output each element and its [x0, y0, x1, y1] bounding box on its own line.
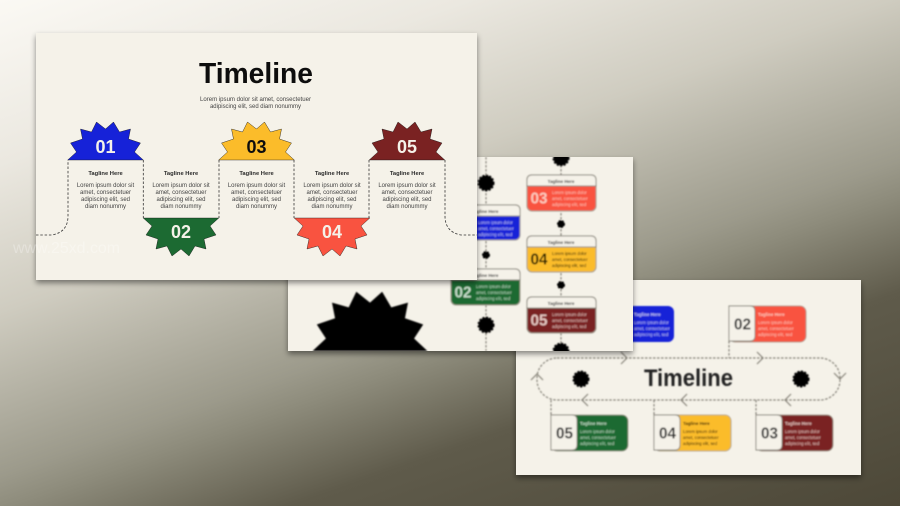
card 04 yellow: 04	[659, 426, 676, 442]
card 03 red: Tagline Here	[548, 179, 575, 184]
panel: front slide, starburst timeline	[36, 33, 477, 280]
card 05 green: Tagline Here	[580, 421, 607, 426]
card 03 maroon: adipiscing elit, sed	[785, 441, 820, 446]
text block 03: Lorem ipsum dolor sit	[228, 183, 286, 189]
text block 02: Tagline Here	[164, 171, 199, 177]
starburst 01 blue	[68, 122, 143, 160]
card 02 red: Tagline Here	[758, 312, 785, 317]
card 04 yellow: adipiscing elit, sed	[552, 263, 587, 268]
card 01 blue: amet, consectetuer	[478, 226, 514, 231]
connectors	[551, 341, 756, 415]
card 04 yellow: Tagline Here	[548, 240, 575, 245]
card 03 red: 03	[530, 190, 548, 208]
card 05 green	[551, 415, 628, 451]
text block 01: Lorem ipsum dolor sit	[77, 183, 135, 189]
black starburst	[313, 292, 427, 351]
card 02 red: Lorem ipsum dolor	[758, 320, 793, 325]
starburst 04 red: 04	[322, 222, 342, 242]
subtitle: Lorem ipsum dolor sit amet, consectetuer	[200, 97, 311, 103]
card 05 maroon: adipiscing elit, sed	[552, 324, 587, 329]
card 03 maroon	[756, 415, 833, 451]
text block 03: diam nonummy	[236, 204, 277, 210]
text block 03: Tagline Here	[239, 171, 274, 177]
card 03 red	[527, 175, 596, 211]
card 04 yellow: adipiscing elit, sed	[683, 441, 718, 446]
text block 04	[303, 171, 361, 210]
card 01 blue	[477, 204, 522, 242]
card 02 red: amet, consectetuer	[758, 326, 794, 331]
subtitle	[200, 97, 311, 110]
text block 02: diam nonummy	[160, 204, 202, 210]
title: Timeline: Timeline	[199, 58, 313, 90]
text block 04: diam nonummy	[311, 204, 353, 210]
card 03 maroon: Lorem ipsum dolor	[785, 429, 820, 434]
card 01 blue: amet, consectetuer	[634, 326, 670, 331]
card 05 maroon: Lorem ipsum dolor	[552, 312, 587, 317]
card 01 blue: Lorem ipsum dolor	[634, 320, 669, 325]
card 02 green: 02	[454, 284, 472, 302]
text block 02: amet, consectetuer	[155, 190, 207, 196]
text block 02: Lorem ipsum dolor sit	[152, 183, 210, 189]
panel: middle slide, vertical timeline	[288, 150, 633, 358]
text block 04: Tagline Here	[315, 171, 350, 177]
text block 02: adipiscing elit, sed	[156, 197, 206, 203]
text block 05: diam nonummy	[386, 204, 428, 210]
starburst 03 yellow: 03	[246, 137, 267, 157]
text block 05: Lorem ipsum dolor sit	[378, 183, 436, 189]
card 04 yellow	[527, 236, 596, 272]
card 03 red: adipiscing elit, sed	[552, 202, 587, 207]
text block 05: Tagline Here	[390, 171, 425, 177]
text block 05: amet, consectetuer	[381, 190, 433, 196]
card 04 yellow: 04	[530, 252, 548, 268]
text block 04: amet, consectetuer	[306, 190, 358, 196]
starburst 02 green: 02	[171, 222, 191, 242]
card 01 blue: Lorem ipsum dolor	[478, 220, 513, 225]
card 02 green: Lorem ipsum dolor	[476, 284, 511, 289]
card 03 maroon: Tagline Here	[785, 421, 812, 426]
card 02 green: Tagline Here	[472, 273, 499, 278]
starburst 03 yellow	[219, 122, 294, 160]
starburst 04 red	[294, 218, 370, 256]
card 04 yellow: amet, consectetuer	[552, 257, 588, 262]
dashed timeline path	[36, 160, 477, 235]
watermark: www.25xd.com	[12, 240, 120, 257]
text block 01: amet, consectetuer	[80, 190, 131, 196]
arrows on racetrack	[531, 352, 846, 406]
racetrack path	[537, 358, 840, 400]
text block 03: amet, consectetuer	[231, 190, 282, 196]
subtitle: adipiscing elit, sed diam nonummy	[210, 104, 301, 110]
card 04 yellow: amet, consectetuer	[683, 435, 719, 440]
card 02 red: 02	[734, 316, 751, 334]
node left	[574, 372, 588, 386]
card 05 green: 05	[556, 426, 573, 442]
card 05 green: amet, consectetuer	[580, 435, 616, 440]
vertical dashed lines	[486, 157, 561, 351]
card 01 blue: adipiscing elit, sed	[634, 332, 669, 337]
card 02 green	[451, 269, 520, 305]
text block 01	[77, 171, 135, 210]
card 03 red: Lorem ipsum dolor	[552, 190, 587, 195]
card 01 blue: Tagline Here	[634, 312, 661, 317]
card 05 maroon: amet, consectetuer	[552, 318, 588, 323]
card 04 yellow: Tagline Here	[683, 421, 710, 426]
card 02 red	[729, 306, 806, 342]
text block 02	[152, 171, 210, 210]
text block 04: Lorem ipsum dolor sit	[303, 183, 361, 189]
starburst 05 maroon	[369, 122, 445, 160]
card 02 red: adipiscing elit, sed	[758, 332, 793, 337]
card 03 maroon: 03	[761, 426, 778, 442]
card 05 green: adipiscing elit, sed	[580, 441, 615, 446]
card 04 yellow	[654, 415, 731, 451]
timeline nodes	[478, 150, 568, 358]
starburst 01 blue: 01	[95, 137, 116, 157]
card 04 yellow: Lorem ipsum dolor	[683, 429, 718, 434]
card 01 blue: Tagline Here	[472, 209, 499, 214]
text block 03	[228, 171, 286, 210]
text block 03: adipiscing elit, sed	[232, 197, 281, 203]
card 03 red: amet, consectetuer	[552, 196, 588, 201]
panel: back slide, racetrack timeline	[516, 280, 861, 475]
text block 01: Tagline Here	[88, 171, 123, 177]
node right	[794, 372, 808, 386]
title: Timeline: Timeline	[644, 365, 733, 392]
card 02 green: adipiscing elit, sed	[476, 296, 511, 301]
card 03 maroon: amet, consectetuer	[785, 435, 821, 440]
card 05 green: Lorem ipsum dolor	[580, 429, 615, 434]
text block 04: adipiscing elit, sed	[307, 197, 357, 203]
card 02 green: amet, consectetuer	[476, 290, 512, 295]
card 01 blue: adipiscing elit, sed	[478, 232, 513, 237]
card 05 maroon: Tagline Here	[548, 301, 575, 306]
starburst 02 green	[143, 218, 219, 256]
card 04 yellow: Lorem ipsum dolor	[552, 251, 587, 256]
text block 05: adipiscing elit, sed	[382, 197, 432, 203]
card 05 maroon: 05	[530, 312, 548, 330]
text block 01: diam nonummy	[85, 204, 126, 210]
card 01 blue	[633, 304, 676, 344]
text block 01: adipiscing elit, sed	[81, 197, 130, 203]
starburst 05 maroon: 05	[397, 137, 417, 157]
card 05 maroon	[527, 297, 596, 333]
text block 05	[378, 171, 436, 210]
